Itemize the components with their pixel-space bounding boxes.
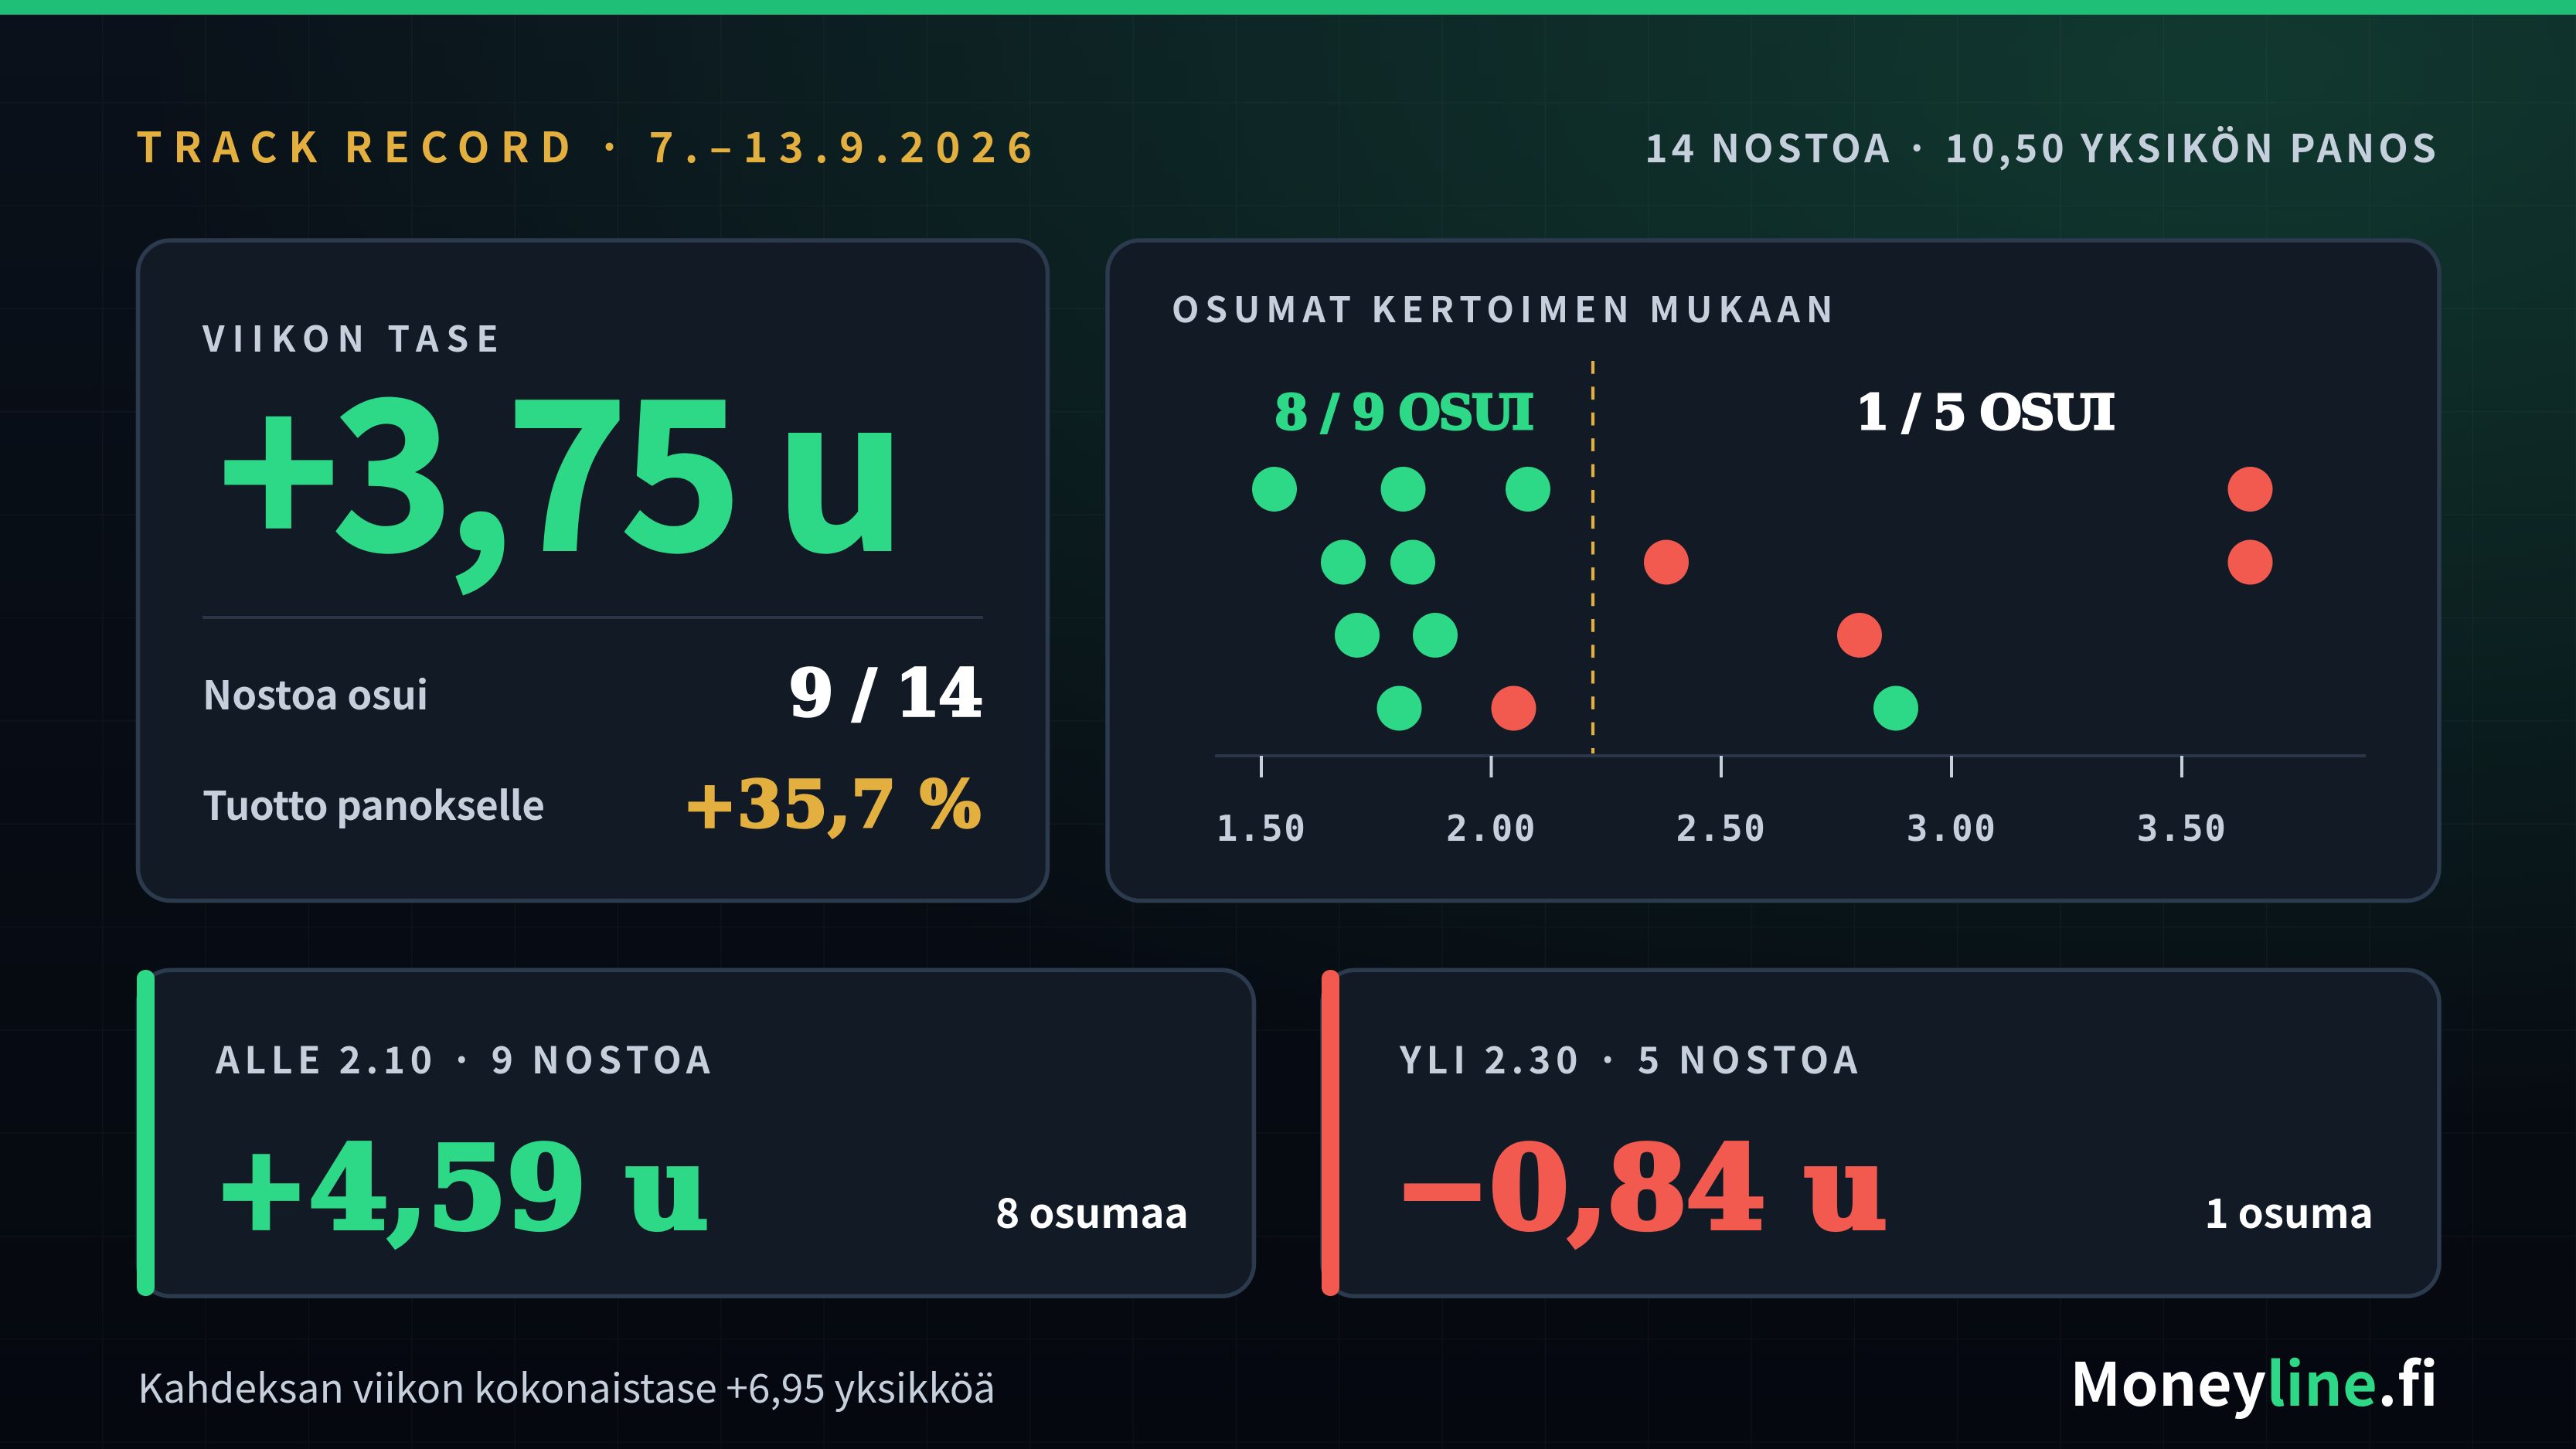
header: summary: 14 NOSTOA · 10,50 YKSIKÖN PANOS — [1645, 118, 2440, 174]
card heading: ALLE 2.10 · 9 NOSTOA — [215, 1030, 715, 1084]
card value: −0,84 u — [1394, 1121, 1887, 1255]
odds axis: 3.00 — [1907, 808, 1996, 849]
threshold line — [1591, 361, 1594, 753]
label: low odds: 8 / 9 OSUI — [1274, 384, 1533, 440]
panel heading: VIIKON TASE — [202, 311, 506, 362]
stat: picks hit: Nostoa osui — [202, 664, 428, 721]
big value: +3,75 u — [218, 311, 899, 609]
footer note: Kahdeksan viikon kokonaistase +6,95 yksikköä — [138, 1356, 995, 1414]
card value: +4,59 u — [213, 1121, 708, 1255]
panel: hits by odds — [1108, 240, 2439, 901]
dot plot — [1252, 467, 2272, 731]
stat: picks hit: 9 / 14 — [789, 655, 982, 731]
odds axis: 1.50 — [1217, 808, 1306, 849]
card heading: YLI 2.30 · 5 NOSTOA — [1399, 1030, 1863, 1084]
accent bar — [1322, 970, 1339, 1296]
panel: weekly balance — [138, 240, 1048, 901]
stat: yield: +35,7 % — [683, 767, 982, 842]
card note: 8 osumaa — [995, 1182, 1189, 1240]
header: title: TRACK RECORD · 7.–13.9.2026 — [136, 114, 1043, 175]
panel: over 2.30 — [1322, 970, 2439, 1296]
top accent bar — [0, 0, 2576, 15]
odds axis: 3.50 — [2137, 808, 2227, 849]
odds axis: 2.00 — [1446, 808, 1536, 849]
odds axis — [1215, 756, 2366, 849]
panel: under 2.10 — [137, 970, 1254, 1296]
stat: yield: Tuotto panokselle — [202, 774, 544, 832]
stat: picks hit — [202, 655, 982, 731]
card note: 1 osuma — [2204, 1182, 2374, 1240]
panel heading: OSUMAT KERTOIMEN MUKAAN — [1172, 282, 1839, 333]
logo: Moneyline.fi — [2070, 1338, 2438, 1423]
accent bar — [137, 970, 155, 1296]
label: high odds: 1 / 5 OSUI — [1856, 384, 2114, 440]
odds axis: 2.50 — [1676, 808, 1766, 849]
stat: yield — [202, 767, 982, 842]
